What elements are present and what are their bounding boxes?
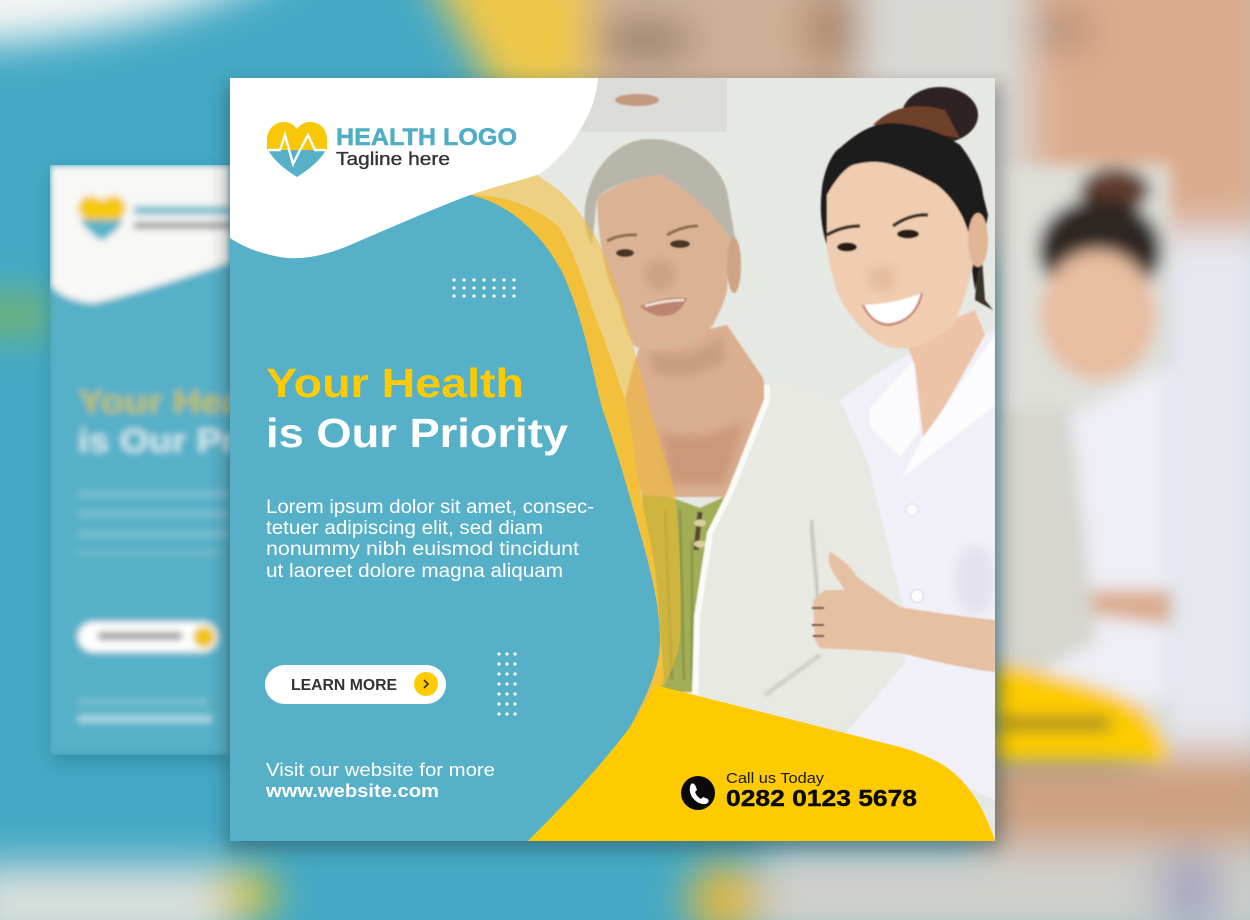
heading: is Our Priority <box>266 410 568 456</box>
hand and arm <box>813 552 995 672</box>
body text: ut laoreet dolore magna aliquam <box>266 561 563 582</box>
main card <box>230 78 995 841</box>
right blurred card <box>995 165 1170 760</box>
website text: Visit our website for more <box>266 759 495 780</box>
phone number: 0282 0123 5678 <box>726 785 917 811</box>
website text <box>265 759 495 801</box>
body text: Lorem ipsum dolor sit amet, consec- <box>266 497 594 518</box>
left blurred card: is Our Priority <box>78 422 329 459</box>
button: learn more <box>265 665 446 704</box>
dots: top <box>452 278 516 298</box>
photo: nurse <box>812 87 995 800</box>
contact <box>681 770 917 811</box>
button: learn more: LEARN MORE <box>291 677 397 694</box>
heading: Your Health <box>266 360 524 406</box>
bun <box>902 87 978 143</box>
coat <box>840 330 995 800</box>
face <box>827 162 975 348</box>
neck and chest <box>622 325 767 497</box>
hair <box>585 139 735 245</box>
teal panel <box>230 195 660 841</box>
body text: nonummy nibh euismod tincidunt <box>266 539 580 560</box>
photo: older woman <box>584 138 822 697</box>
logo name: HEALTH LOGO <box>336 124 517 151</box>
wisps <box>974 264 994 310</box>
left blurred card <box>46 165 230 768</box>
tagline: Tagline here <box>336 149 450 169</box>
white logo panel <box>230 78 598 258</box>
card shadow <box>226 84 1002 850</box>
icon: arrow <box>414 672 438 696</box>
green blouse <box>642 495 728 692</box>
face <box>597 175 730 350</box>
hair <box>821 123 988 290</box>
icon: phone <box>681 776 715 810</box>
yellow accent strips <box>470 170 681 770</box>
body text: tetuer adipiscing elit, sed diam <box>266 518 543 539</box>
photo: wall background <box>470 78 995 841</box>
yellow corner panel <box>528 685 995 841</box>
collars <box>870 361 920 457</box>
heading <box>266 360 568 456</box>
website text: www.website.com <box>265 780 439 801</box>
left blurred card: Your Health <box>78 383 290 420</box>
dots: bottom <box>497 652 517 716</box>
neck <box>905 310 985 437</box>
body text <box>266 497 594 582</box>
logo <box>267 122 517 177</box>
call label: Call us Today <box>726 770 825 787</box>
icon: heart <box>267 122 327 177</box>
cardigan <box>695 378 905 745</box>
